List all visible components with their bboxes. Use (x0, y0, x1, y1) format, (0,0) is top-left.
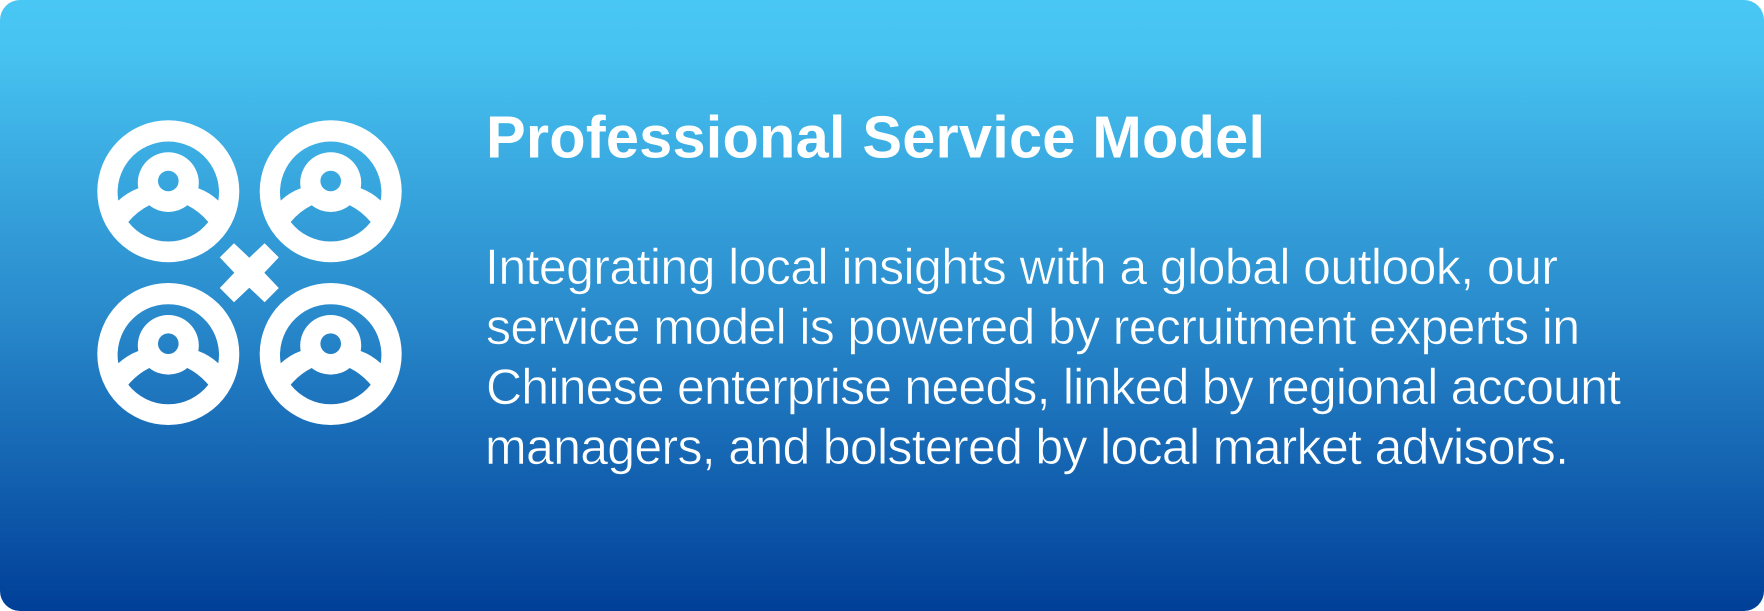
title: Professional Service Model (486, 104, 1265, 171)
description line 4: managers, and bolstered by local market advisors. (485, 419, 1569, 475)
description line 1: Integrating local insights with a global outlook, our (485, 239, 1558, 295)
icon: multiply sign (220, 243, 279, 302)
description line 3: Chinese enterprise needs, linked by regional account (486, 359, 1621, 415)
icon: person top right (260, 120, 402, 262)
icon: person bottom left (97, 283, 239, 425)
icon: four people with multiply sign (97, 120, 402, 425)
icon: person top left (97, 120, 239, 262)
description line 2: service model is powered by recruitment experts in (486, 299, 1580, 355)
text block: description (485, 239, 1621, 475)
icon: person bottom right (260, 283, 402, 425)
